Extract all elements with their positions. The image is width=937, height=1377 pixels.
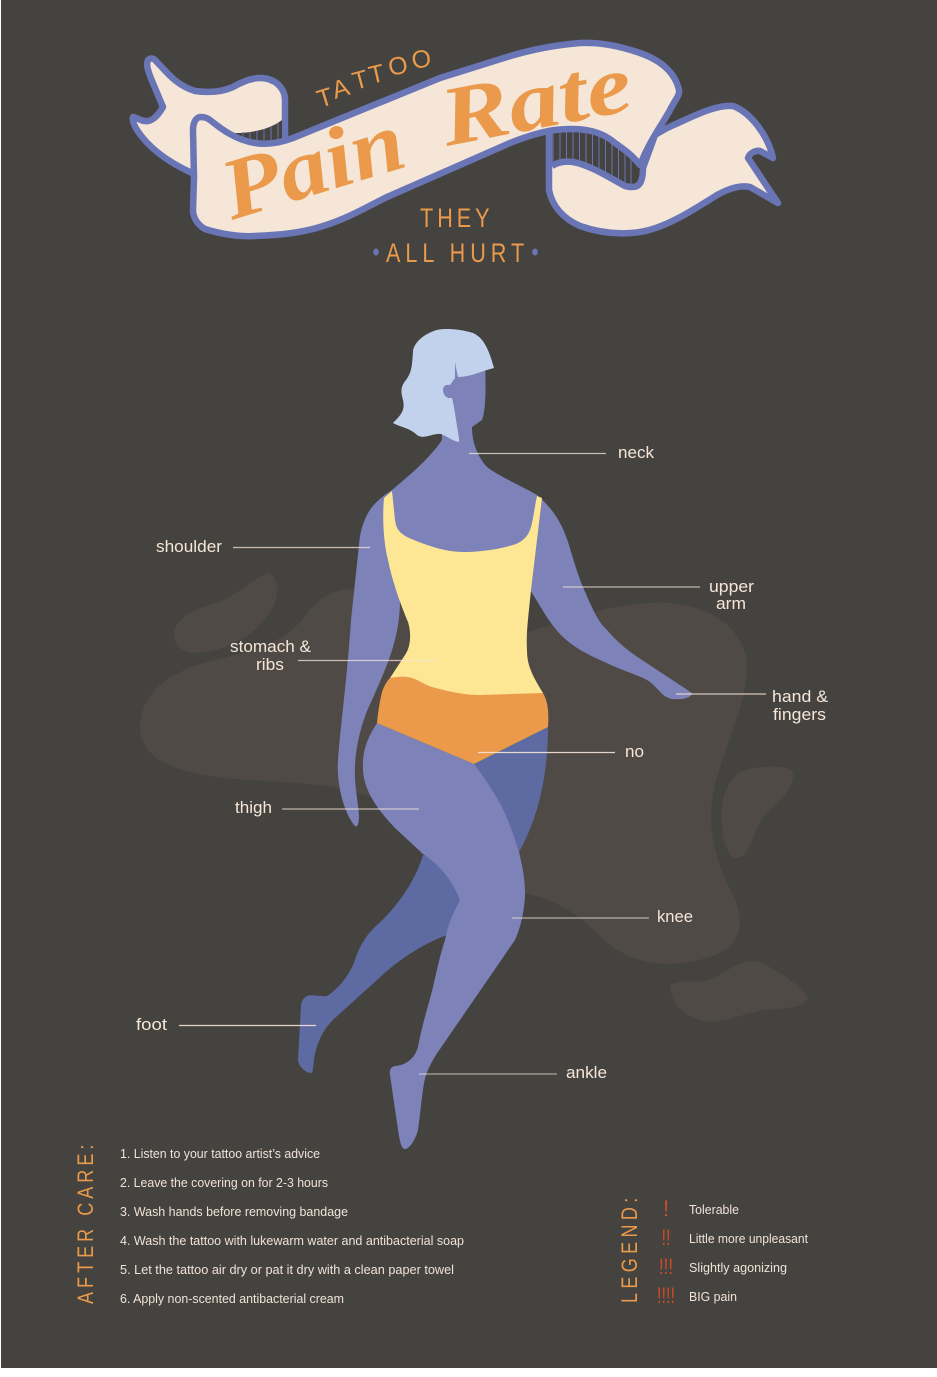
label: stomach and ribs — [230, 637, 435, 674]
label: hand and fingers — [676, 687, 829, 724]
label: foot: foot — [136, 1015, 167, 1034]
back leg lower and foot — [298, 855, 470, 1073]
left arm — [338, 490, 400, 826]
banner left fold shading — [235, 120, 282, 146]
label: knee: knee — [657, 907, 693, 926]
legend marks: !!!! — [657, 1283, 675, 1308]
banner left tail — [133, 58, 285, 173]
label: upper arm — [563, 577, 754, 613]
legend rows — [657, 1196, 809, 1308]
banner right tail — [549, 106, 778, 233]
legend text: Tolerable — [689, 1203, 739, 1217]
head, neck, chest and right arm — [388, 365, 692, 699]
label: upper arm: upper — [709, 577, 754, 596]
legend text — [689, 1203, 809, 1304]
label: hand and fingers: hand & — [772, 687, 829, 706]
after care heading: AFTER CARE: — [74, 1141, 98, 1304]
title word: TATTOO: TATTOO — [314, 44, 433, 114]
subtitle dots — [373, 248, 538, 256]
label: stomach and ribs: stomach & — [230, 637, 312, 656]
legend text: Little more unpleasant — [689, 1232, 809, 1246]
back leg thigh — [474, 727, 548, 852]
hair — [393, 329, 494, 442]
yellow tank top — [383, 491, 543, 710]
banner main ribbon — [193, 43, 679, 236]
label: upper arm: arm — [716, 594, 746, 613]
after care list: 1. Listen to your tattoo artist’s advice — [120, 1147, 320, 1161]
label: ankle: ankle — [566, 1063, 607, 1082]
label: thigh: thigh — [235, 798, 272, 817]
label: stomach and ribs: ribs — [256, 655, 284, 674]
label: no: no — [625, 742, 644, 761]
banner right fold shading — [553, 125, 631, 190]
legend marks: !!! — [659, 1254, 673, 1279]
after care list: 3. Wash hands before removing bandage — [120, 1205, 348, 1219]
label: neck: neck — [618, 443, 654, 462]
label: hand and fingers: fingers — [773, 705, 826, 724]
after care list: 2. Leave the covering on for 2-3 hours — [120, 1176, 328, 1190]
after care list — [120, 1147, 464, 1306]
after care list: 5. Let the tattoo air dry or pat it dry with a clean paper towel — [120, 1263, 454, 1277]
label: shoulder: shoulder — [156, 537, 222, 556]
after care list: 6. Apply non-scented antibacterial cream — [120, 1292, 344, 1306]
subtitle: THEY: THEY — [420, 204, 494, 234]
orange briefs — [377, 677, 548, 764]
subtitle: ALL HURT: ALL HURT — [386, 239, 529, 269]
after care list: 4. Wash the tattoo with lukewarm water and antibacterial soap — [120, 1234, 464, 1248]
title word: Rate: Rate — [432, 37, 639, 165]
legend marks: ! — [663, 1196, 669, 1221]
title banner — [133, 37, 778, 269]
background blobs — [140, 573, 808, 1021]
title word: Pain: Pain — [208, 92, 415, 238]
legend heading: LEGEND: — [618, 1193, 642, 1303]
front leg — [363, 723, 525, 1149]
legend text: Slightly agonizing — [689, 1261, 787, 1275]
figure — [298, 329, 692, 1149]
legend text: BIG pain — [689, 1290, 737, 1304]
legend marks: !! — [662, 1225, 670, 1250]
legend marks — [657, 1196, 675, 1308]
